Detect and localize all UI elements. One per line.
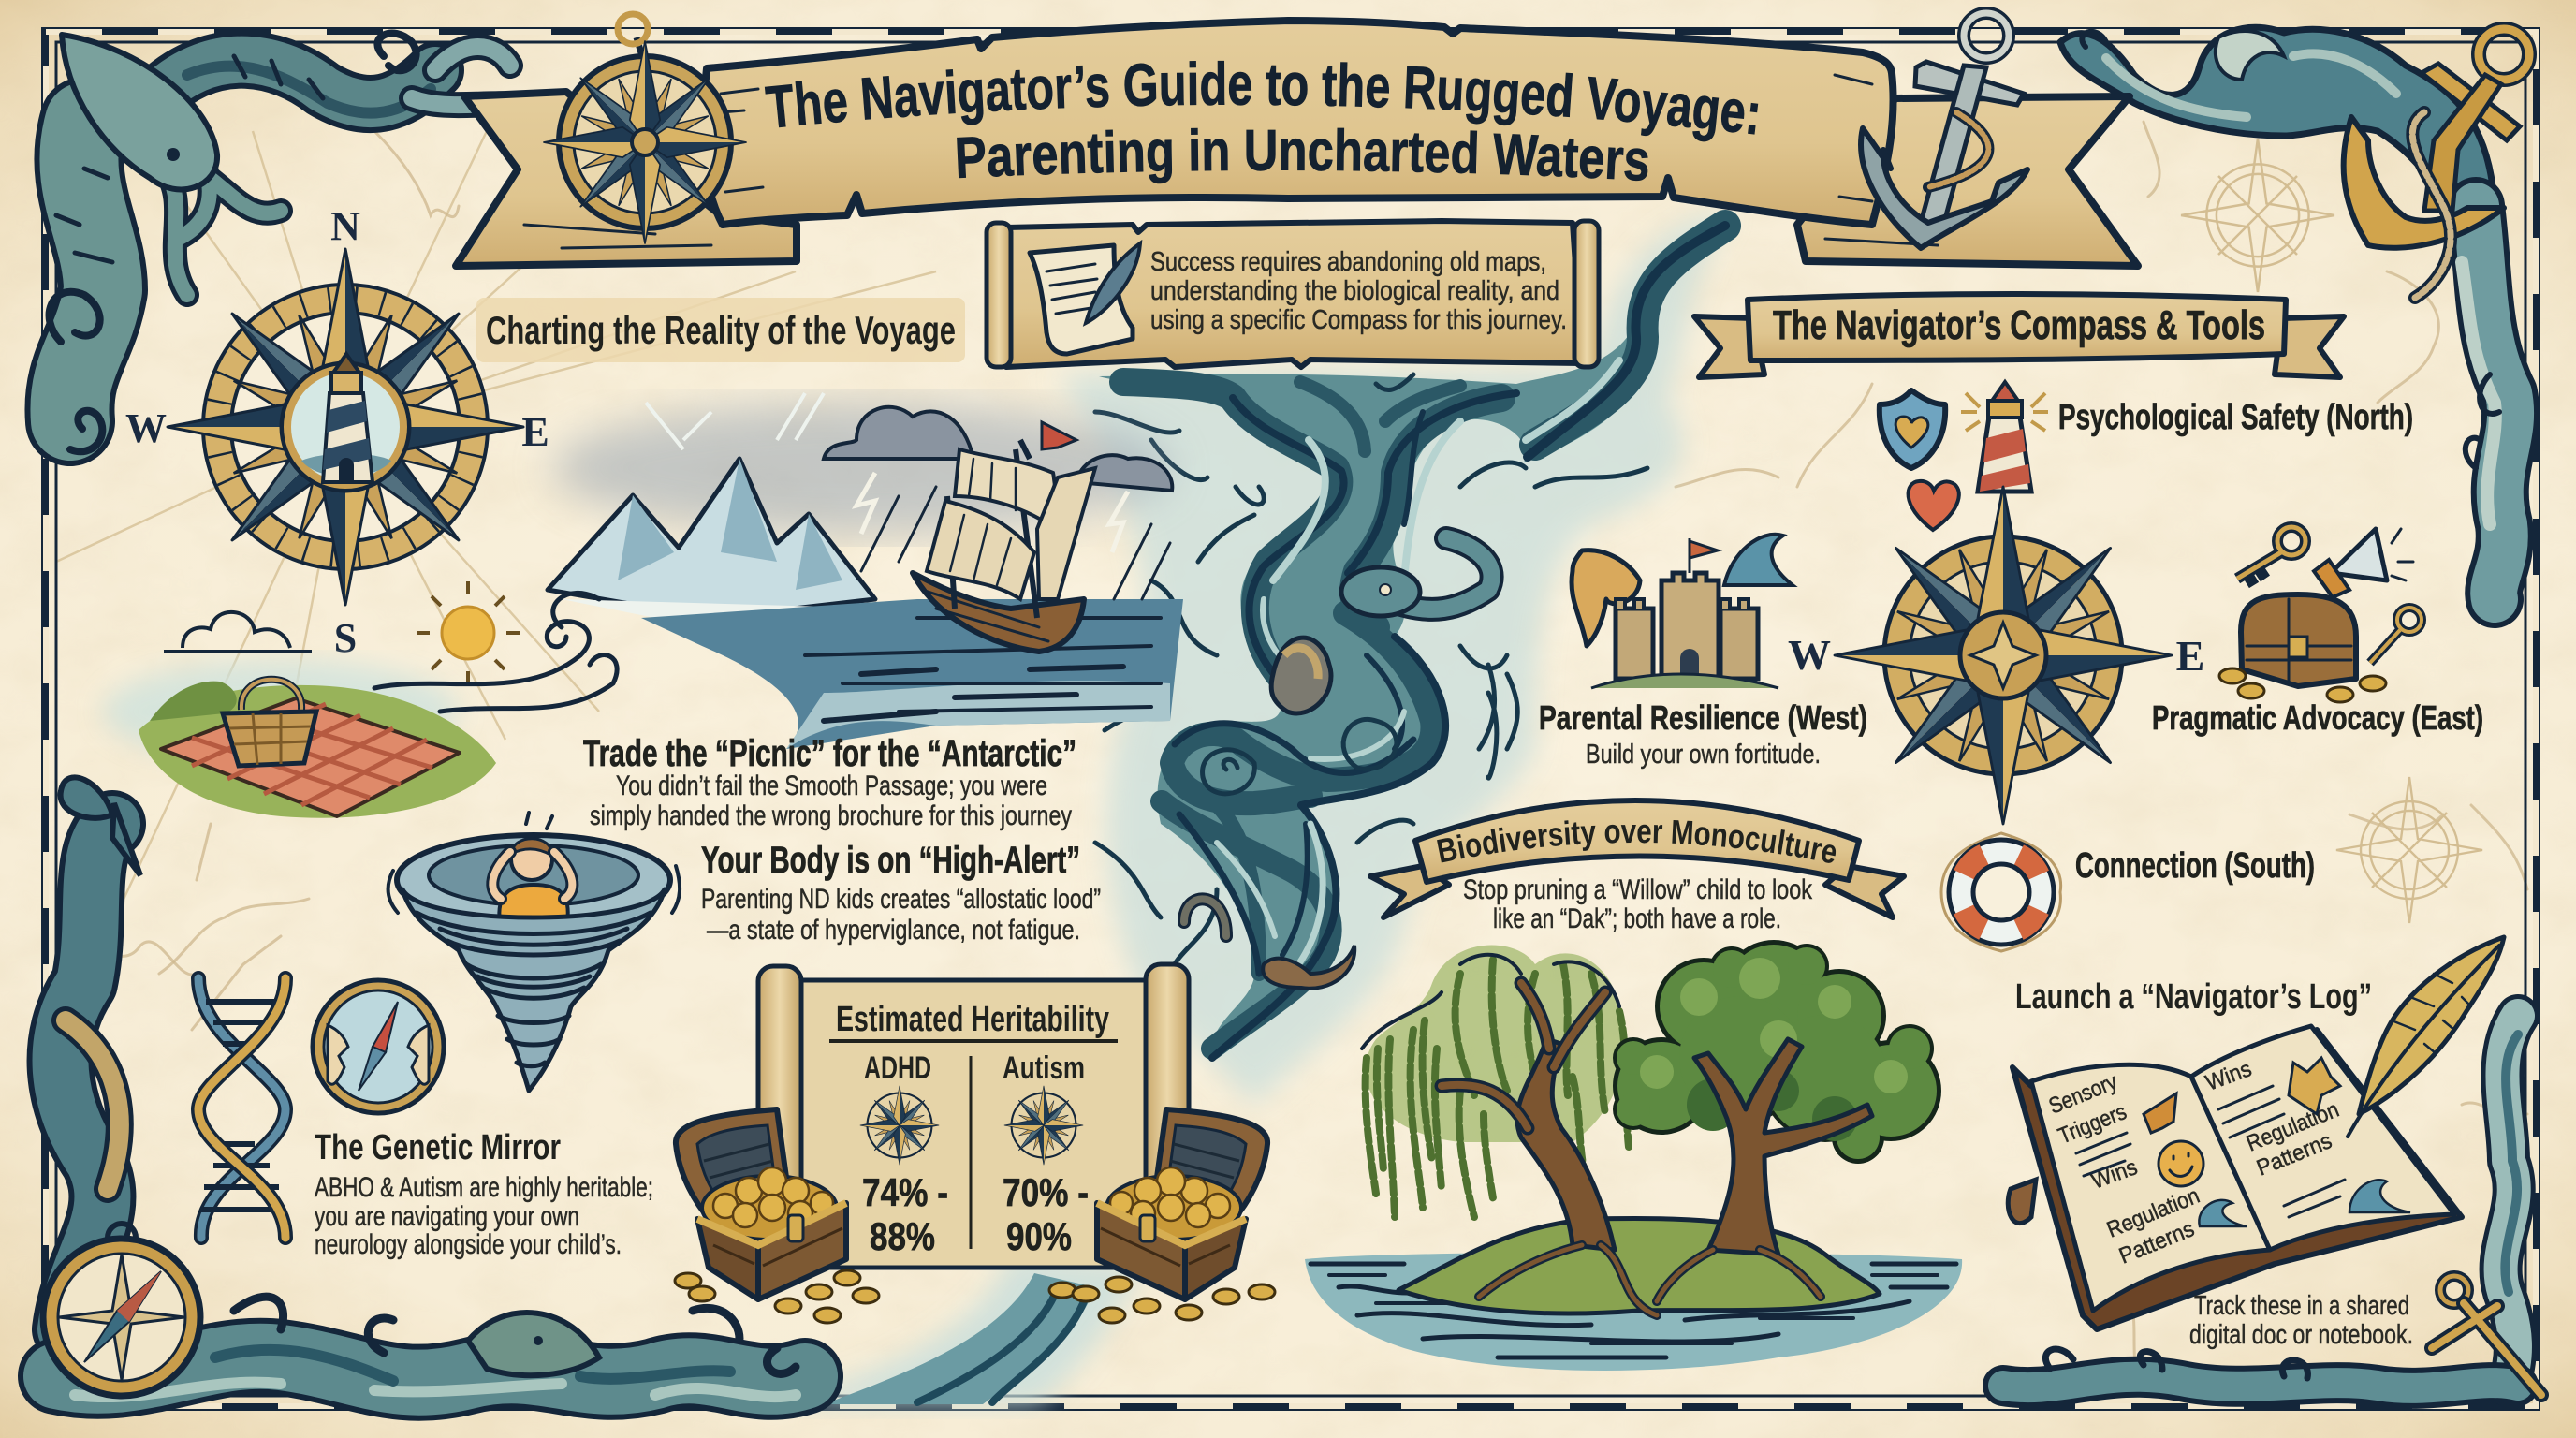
compass letters (125, 203, 549, 661)
corner ornament: kraken and serpent top-left (50, 34, 534, 451)
storm clouds (824, 407, 1172, 599)
oak canopy (1613, 940, 1941, 1164)
icon: castle (1591, 538, 1778, 688)
icon: treasure chest left (675, 1109, 879, 1323)
compass letters: N (330, 203, 360, 249)
column: Autism: 70% - (1003, 1170, 1089, 1214)
icon: title compass (544, 14, 746, 243)
picnic scene (103, 581, 617, 818)
text block: genetic mirror (315, 1128, 653, 1260)
item: connection south: Connection (South) (2075, 846, 2315, 886)
section label: charting (476, 298, 965, 362)
text block: willow and oak: like an “Dak”; both have a role. (1493, 903, 1781, 934)
main title ribbon (703, 21, 1894, 225)
icon: serpent tail and flipper (1184, 899, 1354, 989)
tree trunks (1442, 983, 1872, 1315)
icon: sea serpent in river (1341, 538, 1492, 616)
icon: DNA helix (198, 978, 285, 1238)
icon: treasure chest right (1049, 1109, 1275, 1323)
icon: corner anchor (2432, 1276, 2541, 1395)
text block: genetic mirror: The Genetic Mirror (315, 1128, 561, 1167)
icon: scroll and quill (1030, 243, 1140, 354)
text block: high alert: Your Body is on “High-Alert” (701, 840, 1080, 881)
river lower section (768, 1255, 1142, 1404)
icon: small key (2370, 608, 2422, 663)
text block: track these: Track these in a shared (2194, 1291, 2409, 1321)
icon: megaphone (2314, 529, 2413, 597)
left page notes: Patterns (2115, 1216, 2198, 1269)
text block: trade the picnic: You didn’t fail the Smooth Passage; you were (616, 770, 1047, 801)
icon: lighthouse medallion (282, 354, 409, 491)
item: parental resilience west: Parental Resilience (West) (1539, 698, 1867, 737)
item: psychological safety north (1880, 382, 2413, 530)
column: Autism: 90% (1006, 1214, 1072, 1258)
compass letters: E (521, 409, 549, 455)
icon: heart (1909, 481, 1959, 530)
icon: small brass compass (43, 1224, 200, 1396)
intro scroll (987, 221, 1599, 367)
text block: trade the picnic (583, 733, 1076, 831)
text block: willow and oak: Stop pruning a “Willow” child to look (1463, 874, 1813, 905)
text block: high alert (701, 840, 1101, 946)
icon: tornado with child (388, 813, 680, 1091)
right page notes (2203, 1056, 2410, 1217)
banner: compass and tools: The Navigator’s Compass & Tools (1773, 302, 2265, 348)
mountains (548, 393, 936, 655)
island (1398, 1218, 1880, 1313)
right page notes: Wins (2203, 1056, 2255, 1096)
child in vortex (492, 839, 572, 922)
banner: biodiversity over monoculture: Biodiversity over Monoculture (1437, 820, 1837, 863)
text block: genetic mirror: you are navigating your own (315, 1201, 579, 1232)
text block: genetic mirror: ABHO & Autism are highly heritable; (315, 1172, 653, 1203)
icon: picnic blanket (161, 698, 460, 816)
icon: picnic basket (223, 680, 316, 766)
column: ADHD (860, 1050, 948, 1258)
icon: life buoy (1941, 833, 2061, 951)
river: central water flow (1058, 211, 1732, 1105)
text block: genetic mirror: neurology alongside your child’s. (315, 1229, 622, 1260)
title text: The Navigator’s Guide to the Rugged Voyage: (764, 60, 1758, 142)
right banner tail (1797, 96, 2138, 266)
icon: title anchor (1861, 13, 2027, 248)
column: ADHD: 74% - (862, 1170, 948, 1214)
left page notes: Sensory (2045, 1069, 2121, 1120)
item: pragmatic advocacy east: Pragmatic Advocacy (East) (2152, 698, 2483, 737)
title text: Parenting in Uncharted Waters (957, 127, 1648, 183)
intro text (1150, 247, 1567, 335)
left page notes: Wins (2088, 1154, 2141, 1195)
left banner tail (456, 92, 797, 266)
icon: treasure chest (2219, 594, 2386, 702)
column: Autism: Autism (1003, 1050, 1085, 1086)
corner ornament: wave and gold anchor top-right (2060, 27, 2529, 599)
left page notes (2045, 1069, 2247, 1269)
illustration: willow and oak island (1305, 940, 1962, 1371)
banner: biodiversity over monoculture (1368, 798, 1907, 920)
left page notes: Regulation (2103, 1183, 2203, 1243)
storm scene: antarctic voyage (548, 393, 1183, 749)
compass: navigator's compass: W (1788, 631, 1831, 679)
right page (2191, 1026, 2454, 1250)
item: parental resilience west (1539, 535, 1867, 770)
text block: track these (2189, 1291, 2413, 1350)
title banner (452, 7, 2142, 270)
big compass rose with lighthouse (125, 203, 549, 661)
title text (764, 60, 1758, 183)
illustration: open log book with quill (2008, 937, 2504, 1329)
dark sea (641, 599, 1183, 749)
icon: shield (1880, 390, 1945, 468)
icon: mirror compass with two faces (313, 980, 444, 1113)
right page notes: Regulation (2243, 1097, 2343, 1157)
icon: striped lighthouse (1961, 382, 2048, 492)
text block: track these: digital doc or notebook. (2189, 1320, 2413, 1350)
compass letters: W (125, 405, 167, 451)
water (1305, 1253, 1962, 1371)
icon: feather quill (2348, 937, 2504, 1137)
icon: gold anchor (2344, 29, 2529, 298)
icon: sailing ship (913, 422, 1095, 652)
corner ornament: serpent and compass bottom-left (43, 777, 805, 1397)
text block: trade the picnic: simply handed the wrong brochure for this journey (590, 800, 1072, 831)
item: parental resilience west: Build your own fortitude. (1586, 740, 1821, 770)
compass: navigator's compass (1788, 487, 2204, 824)
icon: muscle arm (1572, 550, 1640, 646)
willow canopy (1362, 946, 1629, 1217)
intro text: Success requires abandoning old maps, (1150, 247, 1546, 277)
text block: high alert: Parenting ND kids creates “allostatic lood” (701, 884, 1101, 915)
item: connection south (1941, 833, 2315, 951)
text block: high alert: —a state of hyperviglance, not fatigue. (707, 915, 1080, 946)
corner ornament: wave and anchor bottom-right (2003, 1016, 2541, 1395)
book cover (2008, 1030, 2462, 1329)
icon: cloud (164, 612, 312, 652)
column: ADHD: 88% (870, 1214, 935, 1258)
intro text: understanding the biological reality, and (1150, 276, 1559, 306)
icon: rock in river (1271, 638, 1331, 713)
column: ADHD: ADHD (864, 1050, 931, 1086)
panel: estimated heritability scroll (758, 964, 1189, 1268)
intro text: using a specific Compass for this journey. (1150, 305, 1567, 335)
left page notes: Triggers (2055, 1099, 2130, 1150)
banner: compass and tools (1694, 294, 2344, 377)
compass letters: S (334, 615, 357, 661)
item: psychological safety north: Psychological Safety (North) (2058, 398, 2413, 437)
text block: trade the picnic: Trade the “Picnic” for the “Antarctic” (583, 733, 1076, 774)
compass: navigator's compass: E (2176, 632, 2204, 680)
text block: willow and oak (1463, 874, 1813, 934)
item: pragmatic advocacy east (2152, 527, 2483, 737)
column: Autism (1003, 1050, 1089, 1258)
icon: small wave (1724, 535, 1793, 585)
icon: sun (417, 581, 520, 684)
section label: charting: Charting the Reality of the Voyage (486, 308, 956, 352)
right page notes: Patterns (2253, 1128, 2335, 1181)
left page (2031, 1064, 2270, 1311)
icon: wind swirls (374, 593, 617, 712)
icon: key (2237, 527, 2305, 585)
heritability heading: Estimated Heritability (836, 1000, 1109, 1039)
heading: navigator's log: Launch a “Navigator’s Log” (2015, 977, 2372, 1017)
